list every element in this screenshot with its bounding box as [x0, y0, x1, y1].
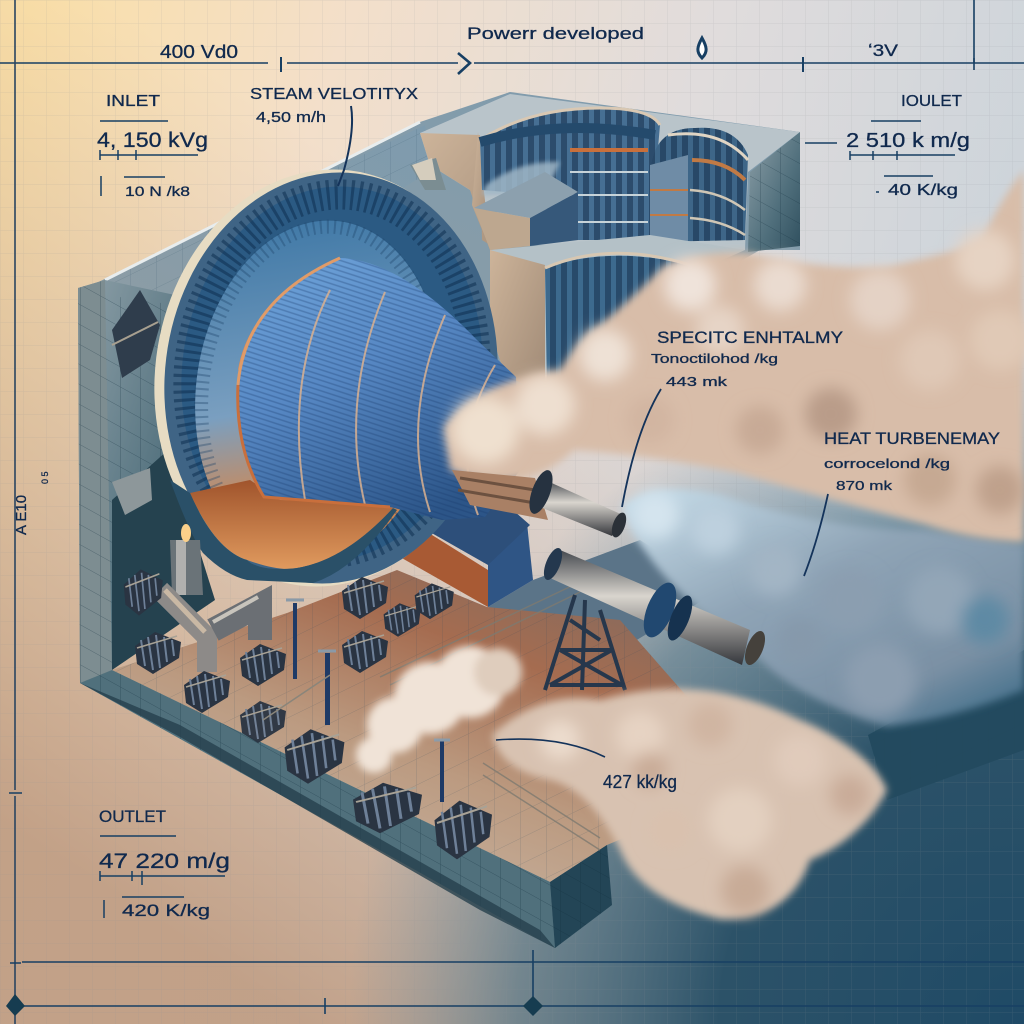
outlet block: 47 220 m/g	[99, 850, 230, 873]
steam velocity callout: 4,50 m/h	[256, 109, 326, 126]
right outlet block	[846, 93, 970, 199]
exhaust shaft lower	[540, 546, 769, 668]
lower block	[490, 235, 745, 375]
tilted shelf	[474, 172, 578, 218]
right chamber	[650, 128, 748, 242]
top dimension labels: Powerr developed	[467, 24, 644, 43]
inlet block: INLET	[106, 93, 160, 110]
inlet outlet connector	[805, 142, 837, 144]
specific enthalpy callout	[622, 328, 843, 507]
cone body	[238, 258, 520, 520]
outlet block: OUTLET	[99, 807, 166, 826]
bottom value callout	[496, 739, 677, 792]
heat turbine callout	[804, 429, 1000, 576]
building: back wall and upper block	[90, 92, 800, 400]
steam velocity callout	[250, 86, 418, 186]
lower orange crescent	[190, 480, 393, 569]
pedestal under turbine	[400, 490, 533, 607]
upper chamber	[480, 108, 660, 240]
exhaust shaft upper	[452, 467, 629, 539]
inlet block: 4, 150 kVg	[97, 129, 208, 152]
specific enthalpy callout: SPECITC ENHTALMY	[657, 328, 843, 347]
inlet block	[97, 93, 208, 199]
left wall of the section	[78, 280, 215, 683]
side axis label	[13, 471, 50, 535]
inlet block: 10 N /k8	[125, 183, 190, 199]
stone block	[420, 133, 530, 270]
wall machine	[112, 290, 160, 378]
icon: water drop	[698, 38, 706, 58]
heat turbine callout: HEAT TURBENEMAY	[824, 429, 1000, 448]
heat turbine callout: corrocelond /kg	[824, 456, 950, 471]
steam velocity callout: STEAM VELOTITYX	[250, 86, 418, 103]
cloud: bottom beige steam	[492, 689, 887, 919]
right outlet block: IOULET	[901, 93, 962, 110]
cloud: small white plume	[356, 646, 522, 773]
outlet block	[99, 807, 230, 920]
cloud: lower blue-grey steam	[622, 489, 1024, 726]
blade disk with orange glow	[176, 206, 460, 578]
specific enthalpy callout: 443 mk	[666, 374, 728, 389]
floor and base	[80, 540, 1024, 948]
lattice tower	[545, 595, 625, 690]
side axis label: A E10	[13, 495, 30, 535]
outlet block: 420 K/kg	[122, 901, 210, 920]
top dimension labels: ʻ3V	[868, 41, 899, 60]
outer casing ring	[131, 150, 519, 606]
bottom value callout: 427 kk/kg	[603, 772, 677, 792]
specific enthalpy callout: Tonoctilohod /kg	[651, 351, 778, 366]
top dimension labels: 400 Vd0	[160, 42, 238, 62]
cloud: upper peach steam	[444, 170, 1024, 542]
equipment on the floor	[124, 524, 600, 859]
side axis label: 0 5	[40, 471, 50, 484]
top dimension labels	[160, 24, 899, 62]
turbine	[131, 150, 521, 606]
right outlet block: 40 K/kg	[888, 182, 958, 199]
heat turbine callout: 870 mk	[836, 478, 893, 493]
right outlet block: 2 510 k m/g	[846, 130, 970, 152]
top slab	[420, 94, 800, 250]
